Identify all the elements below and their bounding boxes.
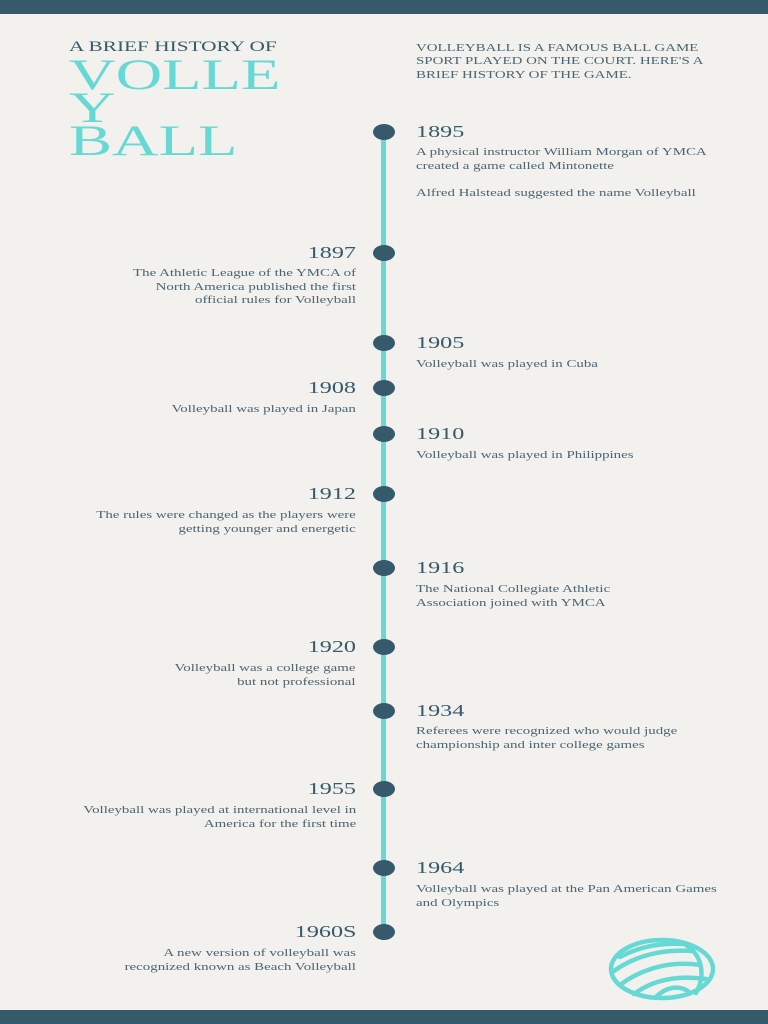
text: Referees were recognized who would judge [416, 726, 677, 737]
entry 1920 [174, 637, 356, 688]
entry 1960S [124, 922, 356, 972]
entry 1912 [96, 484, 356, 534]
text: Volleyball was played at international level in [83, 805, 356, 816]
text: A new version of volleyball was [163, 948, 356, 959]
entry 1905 [416, 333, 598, 370]
text: but not professional [238, 676, 356, 688]
entry 1895 [416, 122, 707, 198]
text: Volleyball was played in Japan [172, 404, 356, 415]
entry 1908 [172, 378, 356, 415]
text: Volleyball was played at the Pan American Games [416, 884, 717, 895]
text: 1934 [416, 701, 464, 720]
text: Volleyball was played in Cuba [416, 359, 598, 370]
text: created a game called Mintonette [416, 160, 614, 172]
text: 1895 [416, 122, 464, 141]
text: Alfred Halstead suggested the name Volleyball [416, 188, 696, 198]
intro text [416, 43, 704, 81]
entry 1910 [416, 424, 634, 461]
text: The rules were changed as the players were [96, 510, 356, 521]
text: Volleyball was played in Philippines [416, 450, 634, 461]
text: 1908 [308, 378, 356, 397]
entry 1916 [416, 558, 610, 608]
text: Association joined with YMCA [416, 598, 606, 608]
text: and Olympics [416, 898, 499, 908]
text: recognized known as Beach Volleyball [125, 962, 356, 972]
text: A physical instructor William Morgan of YMCA [416, 147, 707, 158]
intro text: VOLLEYBALL IS A FAMOUS BALL GAME [416, 43, 698, 54]
title: Y [69, 85, 116, 132]
text: The Athletic League of the YMCA of [133, 268, 356, 279]
bottom bar [0, 1010, 768, 1024]
title: A BRIEF HISTORY OF [69, 39, 277, 55]
title: VOLLE [69, 52, 280, 99]
text: 1920 [308, 637, 356, 656]
entry 1955 [83, 779, 356, 830]
entry 1897 [133, 243, 356, 306]
text: The National Collegiate Athletic [416, 584, 610, 595]
text: 1897 [308, 243, 356, 262]
text: 1964 [416, 858, 464, 877]
entry 1934 [416, 701, 677, 750]
timeline dots [373, 124, 395, 940]
text: 1905 [416, 333, 464, 352]
title [69, 39, 280, 165]
top bar [0, 0, 768, 14]
text: Volleyball was a college game [175, 663, 356, 674]
text: 1916 [416, 558, 464, 577]
entry 1964 [416, 858, 717, 908]
timeline line [381, 132, 386, 932]
text: America for the first time [204, 818, 356, 830]
text: official rules for Volleyball [195, 295, 356, 306]
text: championship and inter college games [416, 740, 645, 750]
text: 1955 [308, 779, 356, 798]
text: 1912 [308, 484, 356, 503]
text: getting younger and energetic [179, 524, 356, 534]
text: 1910 [416, 424, 464, 443]
icon: volleyball [608, 938, 716, 1000]
text: 1960S [294, 922, 356, 941]
text: North America published the first [156, 282, 356, 292]
intro text: BRIEF HISTORY OF THE GAME. [416, 70, 632, 81]
title: BALL [69, 118, 237, 165]
intro text: SPORT PLAYED ON THE COURT. HERE'S A [416, 56, 703, 67]
